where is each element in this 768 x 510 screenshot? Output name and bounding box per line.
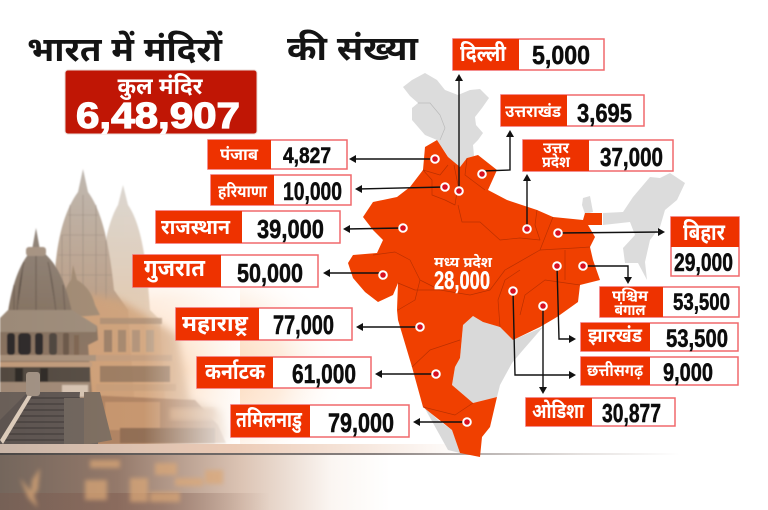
location dots (379, 155, 587, 426)
label: Delhi (453, 39, 604, 70)
label: Tamil Nadu (231, 405, 409, 438)
label: Gujarat: 50,000 (237, 258, 303, 288)
northern grey region (403, 73, 489, 167)
label: Rajasthan: 39,000 (257, 214, 324, 244)
label: Bihar: 29,000 (674, 249, 733, 277)
front domed temple (0, 228, 100, 415)
label: Odisha (526, 398, 675, 428)
middle temple spire (50, 169, 135, 410)
title part one: भारत में मंदिरों (27, 30, 223, 69)
label: Uttar Pradesh: प्रदेश (542, 153, 571, 171)
north-east grey region (603, 173, 685, 280)
label: Tamil Nadu: तमिलनाडु (236, 407, 302, 433)
water reflections (20, 460, 223, 508)
label: Uttar Pradesh: 37,000 (600, 142, 663, 172)
label: Maharashtra: महाराष्ट्र (182, 311, 249, 337)
state boundaries (373, 158, 590, 415)
fade overlay (0, 170, 240, 445)
label: West Bengal: बंगाल (614, 302, 646, 319)
label: Jharkhand (581, 323, 738, 353)
label: Uttarakhand (501, 95, 644, 128)
label: Delhi: दिल्ली (460, 41, 506, 66)
label: Karnataka: 61,000 (292, 359, 356, 389)
label: Tamil Nadu: 79,000 (328, 408, 394, 438)
southern grey region (452, 316, 543, 403)
Madhya Pradesh label: मध्य प्रदेश (434, 253, 492, 270)
stone base (70, 395, 226, 445)
label: Rajasthan: राजस्थान (161, 216, 231, 239)
label: Maharashtra: 77,000 (273, 310, 334, 340)
label: Karnataka: कर्नाटक (205, 359, 266, 384)
far temple spire (90, 185, 165, 400)
label: Bihar: बिहार (683, 219, 726, 245)
label: Punjab (208, 140, 347, 169)
label: West Bengal (600, 287, 739, 319)
label: Haryana: 10,000 (283, 178, 342, 206)
label: Haryana: हरियाणा (218, 181, 268, 201)
waterfront ground (0, 444, 680, 510)
label: Uttar Pradesh (523, 140, 673, 172)
label: Gujarat: गुजरात (144, 255, 206, 283)
label: Uttarakhand: उत्तराखंड (505, 102, 561, 121)
label: Punjab: पंजाब (220, 145, 258, 164)
label: Uttar Pradesh: उत्तर (543, 140, 569, 157)
label: Odisha: 30,877 (602, 398, 661, 428)
label: Maharashtra (176, 308, 352, 340)
arrows (323, 74, 665, 426)
label: Bihar (671, 217, 739, 277)
title part two: की संख्या (287, 29, 419, 68)
label: Rajasthan (156, 211, 340, 244)
label: Punjab: 4,827 (283, 143, 331, 168)
label: Uttarakhand: 3,695 (577, 98, 632, 128)
label: Chhattisgarh: छत्तीसगढ़ (587, 360, 644, 380)
India map (348, 73, 685, 457)
temple photo background (0, 169, 350, 490)
Sikkim (582, 196, 593, 214)
total label: कुल मंदिर (118, 73, 203, 100)
label: Jharkhand: झारखंड (588, 323, 643, 347)
label: West Bengal: पश्चिम (612, 288, 648, 305)
total value: 6,48,907 (76, 95, 240, 136)
Madhya Pradesh label (434, 253, 492, 295)
label: Odisha: ओडिशा (532, 399, 585, 423)
label: West Bengal: 53,500 (673, 289, 730, 316)
label: Jharkhand: 53,500 (666, 325, 728, 353)
label: Karnataka (197, 357, 371, 389)
label: Chhattisgarh: 9,000 (663, 359, 713, 387)
label: Chhattisgarh (581, 357, 738, 387)
label: Delhi: 5,000 (532, 40, 590, 70)
total temples box (65, 70, 257, 136)
right side hall (60, 295, 228, 445)
label: Haryana (211, 175, 351, 206)
Kerala (423, 405, 460, 453)
title (27, 29, 419, 69)
small dome shrine (60, 265, 100, 318)
label: Gujarat (133, 255, 318, 288)
hall tiers (96, 318, 176, 391)
orange mainland (348, 140, 602, 457)
Madhya Pradesh value: 28,000 (434, 267, 490, 295)
staircase (0, 372, 112, 445)
